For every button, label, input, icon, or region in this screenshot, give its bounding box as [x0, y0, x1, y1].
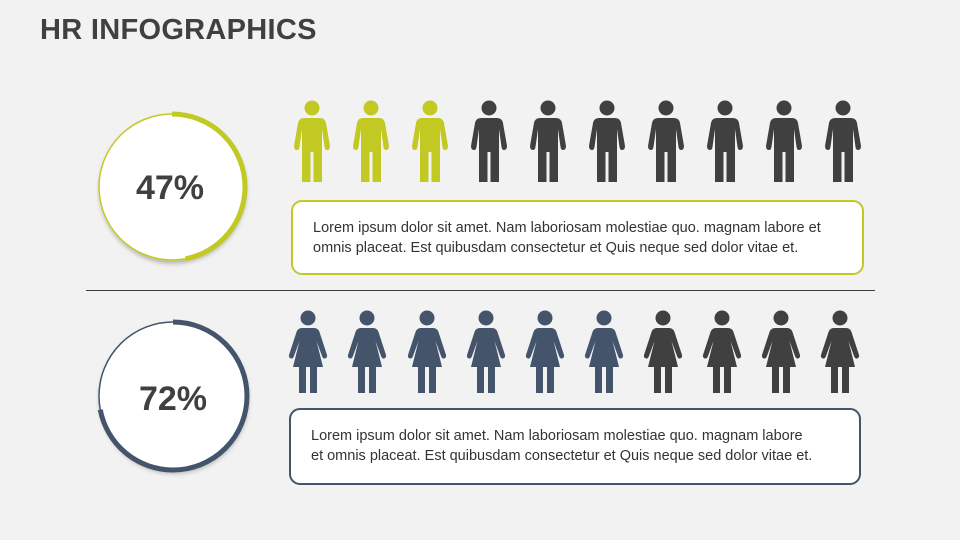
text box 2: et omnis placeat. Est quibusdam consectetur et Quis neque sed dolor vitae et.	[311, 448, 812, 464]
text box 1: Lorem ipsum dolor sit amet. Nam laboriosam molestiae quo. magnam labore et	[313, 220, 821, 236]
title: HR INFOGRAPHICS	[40, 14, 317, 46]
chart: 47% ring: 47%	[136, 169, 204, 207]
text box 1	[291, 200, 864, 275]
text box 1: omnis placeat. Est quibusdam consectetur et Quis neque sed dolor vitae et.	[313, 240, 798, 256]
text box 2	[289, 408, 861, 485]
chart: 72% ring: 72%	[139, 380, 207, 418]
text box 2: Lorem ipsum dolor sit amet. Nam laboriosam molestiae quo. magnam labore	[311, 428, 803, 444]
